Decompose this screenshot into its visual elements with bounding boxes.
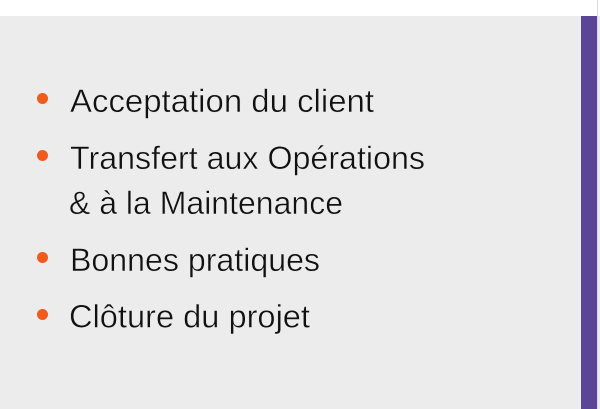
bullet list xyxy=(37,83,425,334)
item: Acceptation du client: Acceptation du client xyxy=(70,83,374,119)
item: Transfert aux Opérations & à la Maintenance: Transfert aux Opérations xyxy=(70,140,425,176)
item: Bonnes pratiques: Bonnes pratiques xyxy=(70,242,320,278)
item: Transfert aux Opérations & à la Maintenance xyxy=(37,140,425,221)
item: Transfert aux Opérations & à la Maintenance: & à la Maintenance xyxy=(69,185,343,221)
faint vertical edge line xyxy=(597,0,598,409)
purple side bar xyxy=(581,16,597,409)
item: Clôture du projet: Clôture du projet xyxy=(69,298,310,334)
